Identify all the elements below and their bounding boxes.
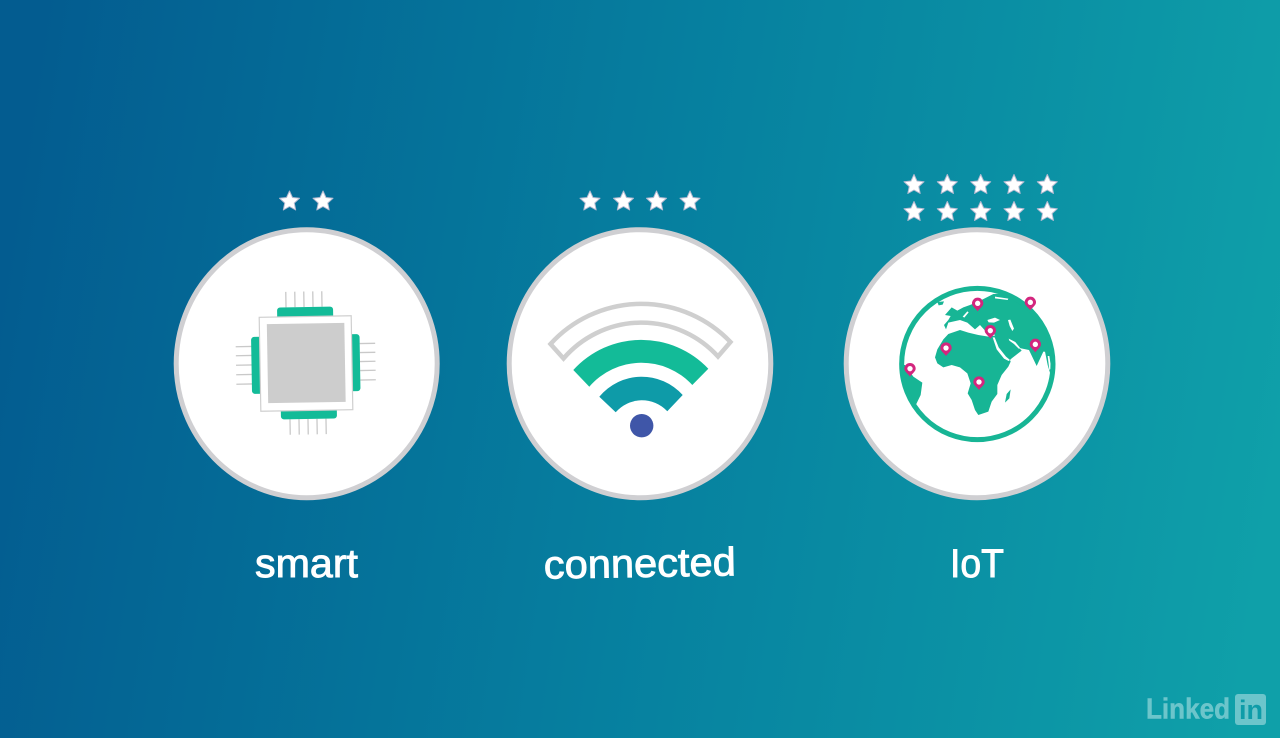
pin xyxy=(1025,297,1036,310)
wifi inner arc xyxy=(599,377,683,412)
icon: microchip xyxy=(235,290,377,436)
wifi dot xyxy=(630,414,653,437)
circle badge: smart xyxy=(176,230,437,498)
wifi outer arc, empty xyxy=(550,304,730,358)
pin xyxy=(985,325,996,339)
circle badge: IoT xyxy=(846,230,1108,498)
panel: connected xyxy=(509,191,771,588)
label: smart: smart xyxy=(255,542,358,586)
pin xyxy=(940,342,952,356)
rating: four stars xyxy=(580,191,700,210)
wordmark: Linked xyxy=(1146,694,1230,726)
icon: wifi signal xyxy=(550,304,730,437)
globe ring xyxy=(902,288,1053,440)
rating: two stars xyxy=(280,191,333,210)
icon: globe with location pins xyxy=(896,288,1060,440)
in box xyxy=(1235,694,1266,725)
globe land masses xyxy=(904,294,1050,415)
wifi middle arc xyxy=(573,340,708,387)
label: connected: connected xyxy=(543,540,736,588)
chip pins xyxy=(235,290,377,436)
pin xyxy=(1030,339,1041,352)
inland seas xyxy=(963,297,1051,370)
in letters: in xyxy=(1239,695,1263,725)
panel: IoT xyxy=(846,174,1108,586)
chip body xyxy=(259,316,353,411)
circle badge: connected xyxy=(509,230,771,498)
chip core xyxy=(267,323,346,403)
watermark: LinkedIn logo xyxy=(1146,694,1266,726)
pin xyxy=(973,376,985,390)
rating: ten stars xyxy=(904,174,1057,220)
pin xyxy=(904,363,916,377)
pin xyxy=(972,298,983,311)
panel: smart xyxy=(176,191,437,586)
location pins xyxy=(904,297,1041,390)
chip green contact bars xyxy=(251,306,361,420)
label: IoT: IoT xyxy=(950,542,1004,586)
